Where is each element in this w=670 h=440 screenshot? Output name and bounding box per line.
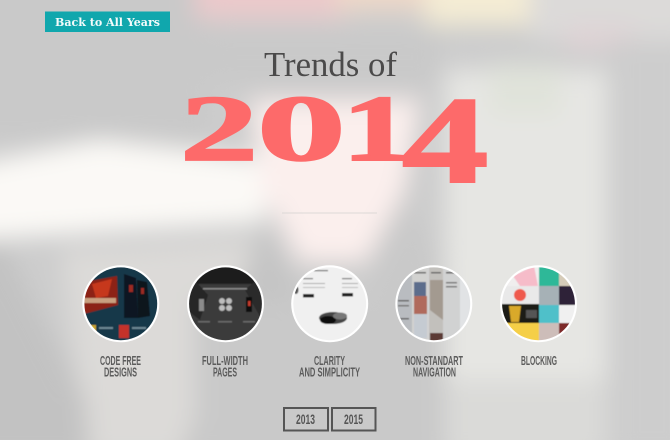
thumbnail: non-standart navigation — [395, 265, 472, 342]
title: year 2014: 0 — [257, 76, 346, 180]
button: 2015 — [332, 408, 376, 430]
divider — [282, 212, 377, 214]
back button — [45, 12, 170, 32]
label: full-width pages: FULL-WIDTH — [202, 353, 248, 368]
title: year 2014: 4 — [402, 72, 488, 209]
thumbnail: full-width pages — [187, 265, 264, 342]
label: code free designs: DESIGNS — [104, 365, 137, 380]
title: year 2014 — [180, 72, 488, 209]
thumbnail: blocking — [500, 265, 577, 342]
button: 2013 — [284, 408, 328, 430]
label: full-width pages: PAGES — [213, 365, 237, 380]
trend: non-standart navigation — [394, 264, 476, 380]
label: blocking: BLOCKING — [521, 353, 557, 368]
trend: blocking — [500, 265, 577, 365]
title: year 2014: 2 — [180, 76, 258, 180]
back button: Back to All Years — [55, 15, 160, 29]
trend: code free designs — [80, 264, 162, 380]
label: non-standart navigation: NAVIGATION — [413, 365, 456, 380]
label: clarity and simplicity: CLARITY — [314, 353, 345, 368]
label: code free designs: CODE FREE — [100, 353, 141, 368]
button: 2013: 2013 — [296, 411, 315, 427]
label: non-standart navigation: NON-STANDART — [405, 353, 463, 368]
title: Trends of: Trends of — [264, 45, 397, 84]
thumbnail: code free designs — [82, 265, 160, 342]
trend: full-width pages — [185, 264, 267, 380]
trend: clarity and simplicity — [290, 264, 372, 380]
label: clarity and simplicity: AND SIMPLICITY — [299, 365, 360, 380]
title: year 2014: 1 — [342, 76, 412, 180]
button: 2015: 2015 — [344, 411, 363, 427]
thumbnail: clarity and simplicity — [291, 265, 368, 342]
